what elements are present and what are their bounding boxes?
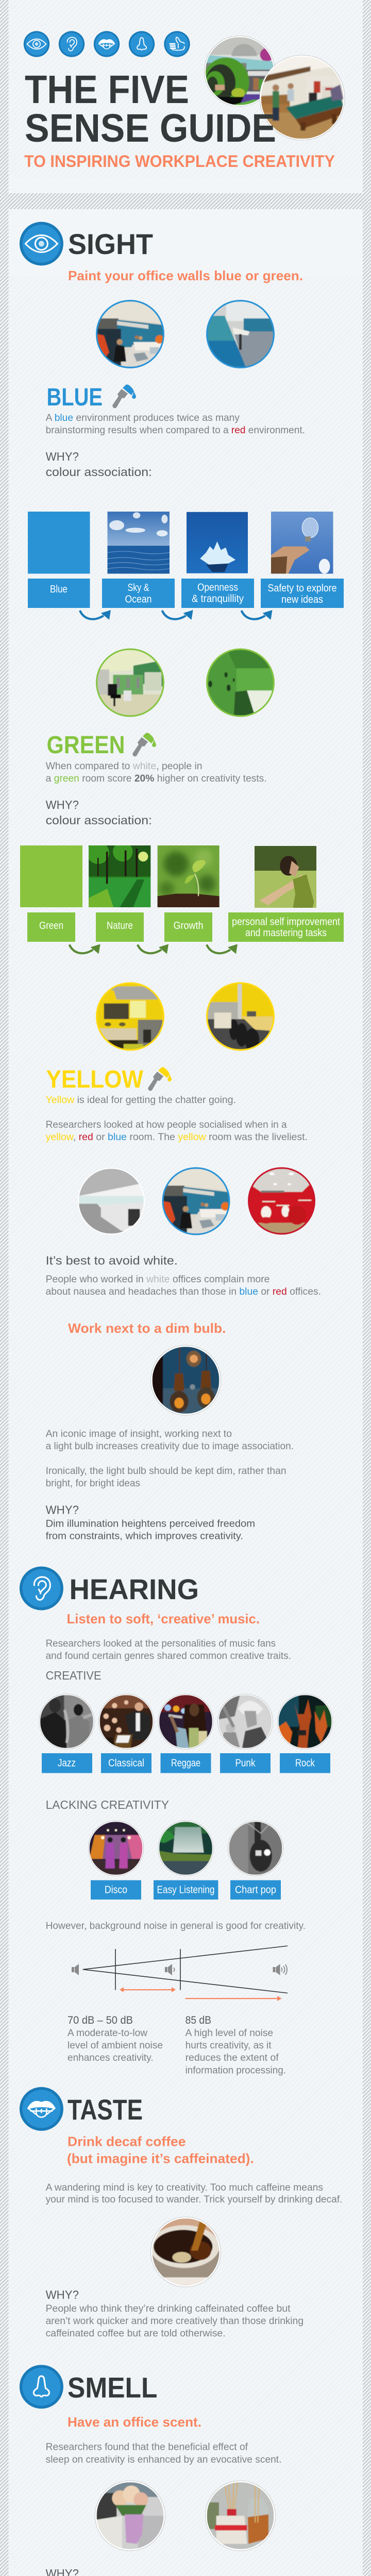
- label: reggae: [161, 1753, 211, 1773]
- text: high noise: [185, 2014, 286, 2076]
- image: seedling: [158, 845, 220, 907]
- text: moderate noise: 70 dB – 50 dB: [68, 2014, 133, 2026]
- label: chart pop: Chart pop: [235, 1885, 276, 1896]
- image: hand with bulb: [271, 512, 333, 574]
- text: why decaf: [46, 2288, 303, 2339]
- photo: white office: [78, 1167, 145, 1234]
- label: chart pop: [230, 1880, 281, 1900]
- label: punk: [220, 1753, 271, 1773]
- label: jazz: Jazz: [58, 1757, 76, 1769]
- icon: green paint brush: [132, 733, 156, 756]
- icon: speaker medium: [165, 1964, 174, 1975]
- label: rock: Rock: [295, 1757, 315, 1769]
- tip: office scent: Have an office scent.: [68, 2414, 201, 2430]
- photo: blue office repeat: [162, 1167, 230, 1235]
- text: moderate noise: enhances creativity.: [68, 2053, 154, 2063]
- image: sky and ocean: [107, 512, 170, 574]
- label: personal improvement: and mastering tasks: [245, 927, 327, 939]
- text: blue finding: [46, 413, 305, 436]
- heading: lacking creativity: LACKING CREATIVITY: [46, 1798, 169, 1811]
- text: music finding: Researchers looked at the personalities of music fans: [46, 1638, 276, 1649]
- text: why green: [46, 798, 152, 827]
- icon: speaker quiet: [72, 1964, 79, 1975]
- text: music finding: and found certain genres shared common creative traits.: [46, 1651, 291, 1662]
- text: why decaf: People who think they’re drinking caffeinated coffee but: [46, 2303, 291, 2314]
- photo: yellow office: [206, 982, 275, 1052]
- icon: smell: [20, 2365, 63, 2409]
- text: high noise: 85 dB: [185, 2014, 211, 2026]
- label: nature: [96, 912, 144, 942]
- photo: pool table room: [260, 55, 345, 140]
- heading: blue: BLUE: [46, 384, 103, 411]
- label: classical: Classical: [108, 1757, 144, 1769]
- tip: decaf coffee: (but imagine it’s caffeinated).: [67, 2150, 254, 2166]
- photo: yellow meeting room: [96, 982, 164, 1051]
- label: growth: [164, 912, 212, 942]
- section: hearing: [20, 1566, 332, 2076]
- heading: creative: CREATIVE: [46, 1669, 102, 1682]
- tip: paint walls: Paint your office walls blue or green.: [68, 268, 303, 283]
- subtitle: TO INSPIRING WORKPLACE CREATIVITY: [24, 152, 335, 171]
- text: green finding: [46, 761, 267, 784]
- label: disco: Disco: [105, 1885, 127, 1896]
- label: sky and ocean: Sky &: [128, 582, 149, 594]
- icon: thumb: [164, 31, 190, 57]
- text: yellow findings: Researchers looked at how people socialised when in a: [46, 1120, 287, 1130]
- image: forest: [89, 845, 150, 907]
- arrow: [207, 944, 238, 954]
- colour chain: green labels: [27, 912, 344, 942]
- title: SENSE GUIDE: [25, 106, 276, 150]
- text: scent finding: [46, 2442, 281, 2465]
- text: high noise: hurts creativity, as it: [185, 2040, 272, 2051]
- arrow: [70, 944, 100, 954]
- text: why dim: [46, 1503, 255, 1542]
- label: openness: & tranquillity: [192, 594, 244, 605]
- heading: sight: SIGHT: [68, 228, 153, 260]
- text: bulb findings: Ironically, the light bulb should be kept dim, rather than: [46, 1466, 286, 1477]
- text: high noise: A high level of noise: [185, 2028, 273, 2039]
- heading: green: GREEN: [46, 732, 125, 759]
- tip: dim bulb: Work next to a dim bulb.: [68, 1320, 226, 1336]
- genre: chart pop: [228, 1821, 283, 1900]
- label: openness: [181, 579, 254, 608]
- label: green: [27, 912, 75, 942]
- icon: ear: [59, 31, 85, 57]
- heading: smell: SMELL: [68, 2371, 157, 2403]
- label: reggae: Reggae: [171, 1757, 200, 1769]
- text: why green: WHY?: [46, 798, 79, 811]
- text: background noise: However, background noise in general is good for creativity.: [46, 1921, 306, 1931]
- label: blue: Blue: [50, 584, 68, 595]
- label: safety: new ideas: [281, 594, 323, 605]
- panel: header: [24, 31, 345, 171]
- text: blue finding: A blue environment produces twice as many: [46, 413, 240, 423]
- photo: green arch office: [203, 36, 275, 107]
- heading: hearing: HEARING: [69, 1573, 199, 1605]
- icon: taste: [20, 2087, 63, 2131]
- text: music finding: [46, 1638, 291, 1662]
- photo: green office: [96, 648, 164, 717]
- genre: punk: [217, 1694, 273, 1773]
- text: wandering mind: A wandering mind is key to creativity. Too much caffeine means: [46, 2182, 323, 2193]
- text: avoid white: about nausea and headaches than those in blue or red offices.: [46, 1286, 321, 1297]
- heading: yellow: YELLOW: [46, 1066, 144, 1093]
- label: disco: [91, 1880, 141, 1900]
- photo: red office: [248, 1167, 315, 1234]
- text: scent finding: sleep on creativity is enhanced by an evocative scent.: [46, 2454, 281, 2465]
- text: yellow findings: [46, 1095, 308, 1143]
- label: classical: [101, 1753, 151, 1773]
- icon: yellow paint brush: [148, 1067, 172, 1091]
- colour chain: blue images: [28, 512, 333, 574]
- text: why dim: Dim illumination heightens perceived freedom: [46, 1519, 255, 1529]
- text: moderate noise: [68, 2014, 163, 2063]
- plain panel areas: [8, 178, 363, 193]
- text: why decaf: aren’t work quicker and more creatively than those drinking: [46, 2316, 303, 2327]
- heading: taste: TASTE: [68, 2093, 143, 2126]
- label: rock: [280, 1753, 330, 1773]
- label: sky and ocean: [102, 579, 175, 608]
- icon: sight: [20, 222, 63, 266]
- text: why blue: WHY?: [46, 450, 79, 463]
- icon row: five senses: [24, 31, 190, 57]
- arrow: moderate range: [120, 1987, 176, 1992]
- label: easy listening: [154, 1880, 218, 1900]
- tip: soft music: Listen to soft, ‘creative’ music.: [67, 1611, 260, 1626]
- plain panel area: sight top: [8, 209, 363, 276]
- text: wandering mind: [46, 2182, 343, 2205]
- icon: eye: [24, 31, 49, 57]
- text: blue finding: brainstorming results when compared to a red environment.: [46, 425, 305, 436]
- text: wandering mind: your mind is too focused to wander. Trick yourself by drinking decaf.: [46, 2194, 343, 2205]
- genre: rock: [277, 1694, 333, 1773]
- text: high noise: information processing.: [185, 2065, 286, 2076]
- text: bulb findings: [46, 1429, 294, 1489]
- text: moderate noise: level of ambient noise: [68, 2040, 163, 2051]
- label: nature: Nature: [107, 920, 133, 931]
- genre: classical: [99, 1694, 154, 1773]
- photo: blue office: [96, 300, 164, 368]
- arrow: [241, 610, 272, 620]
- genre: disco: [89, 1821, 143, 1900]
- icon: nose: [129, 31, 155, 57]
- swatch: green: [20, 845, 82, 907]
- text: why blue: colour association:: [46, 465, 152, 479]
- text: scent finding: Researchers found that the beneficial effect of: [46, 2442, 248, 2453]
- label: jazz: [42, 1753, 92, 1773]
- genre: jazz: [39, 1694, 94, 1773]
- text: yellow findings: yellow, red or blue room. The yellow room was the liveliest.: [46, 1132, 308, 1143]
- text: why dim: WHY?: [46, 1503, 79, 1517]
- text: green finding: When compared to white, people in: [46, 761, 203, 772]
- icon: blue paint brush: [112, 384, 136, 408]
- text: high noise: reduces the extent of: [185, 2053, 279, 2063]
- text: bulb findings: bright, for bright ideas: [46, 1478, 140, 1489]
- chart: noise level wedge: [72, 1946, 288, 2001]
- hatch band top: [8, 193, 363, 209]
- label: blue: [28, 579, 90, 608]
- label: openness: Openness: [197, 582, 238, 594]
- text: avoid white: People who worked in white offices complain more: [46, 1274, 269, 1285]
- photo: coffee: [150, 2216, 221, 2287]
- text: why decaf: caffeinated coffee but are told otherwise.: [46, 2328, 226, 2339]
- label: easy listening: Easy Listening: [157, 1885, 214, 1896]
- section: smell: [20, 2365, 281, 2576]
- text: yellow findings: Yellow is ideal for getting the chatter going.: [46, 1095, 236, 1106]
- photo: flowers on desk: [95, 2481, 165, 2551]
- arrow: high range: [185, 1996, 281, 2001]
- tip: decaf coffee: [67, 2134, 254, 2166]
- photo: reed diffusers: [205, 2481, 275, 2551]
- arrow: [162, 610, 193, 620]
- arrow: [80, 610, 111, 620]
- icon: speaker loud: [273, 1964, 287, 1975]
- text: why dim: from constraints, which improves creativity.: [46, 1531, 243, 1542]
- text: why blue: [46, 450, 152, 479]
- text: why decaf: WHY?: [46, 2288, 79, 2301]
- label: personal improvement: personal self improvement: [232, 917, 340, 928]
- label: safety: Safety to explore: [268, 583, 337, 594]
- label: safety: [261, 579, 344, 608]
- label: growth: Growth: [173, 920, 203, 931]
- text: moderate noise: A moderate-to-low: [68, 2028, 147, 2039]
- label: sky and ocean: Ocean: [125, 594, 151, 605]
- text: bulb findings: An iconic image of insight, working next to: [46, 1429, 232, 1439]
- genre: easy listening: [154, 1821, 218, 1900]
- photo: light bulbs: [150, 1345, 221, 1415]
- text: bulb findings: a light bulb increases creativity due to image association.: [46, 1441, 294, 1452]
- title: THE FIVE: [25, 67, 189, 112]
- text: why green: colour association:: [46, 814, 152, 827]
- image: lotus: [187, 512, 248, 573]
- label: personal improvement: [228, 912, 344, 942]
- photo: blue partitions: [206, 300, 275, 368]
- icon: tongue: [94, 31, 120, 57]
- arrow: [138, 944, 168, 954]
- section: taste: [20, 2087, 342, 2339]
- label: punk: Punk: [235, 1757, 256, 1769]
- label: green: Green: [39, 920, 63, 931]
- genre: reggae: [158, 1694, 213, 1773]
- swatch: blue: [28, 512, 90, 574]
- section: sight: [20, 222, 344, 1542]
- photo: green room: [206, 648, 275, 717]
- icon: hearing: [20, 1566, 63, 1611]
- title: [25, 67, 276, 150]
- image: woman in field: [255, 846, 316, 908]
- colour chain: blue labels: [28, 579, 344, 608]
- text: avoid white: It’s best to avoid white.: [46, 1254, 178, 1267]
- tip: decaf coffee: Drink decaf coffee: [68, 2134, 185, 2149]
- colour chain: green images: [20, 842, 316, 908]
- text: green finding: a green room score 20% higher on creativity tests.: [46, 773, 267, 784]
- text: avoid white: [46, 1254, 321, 1297]
